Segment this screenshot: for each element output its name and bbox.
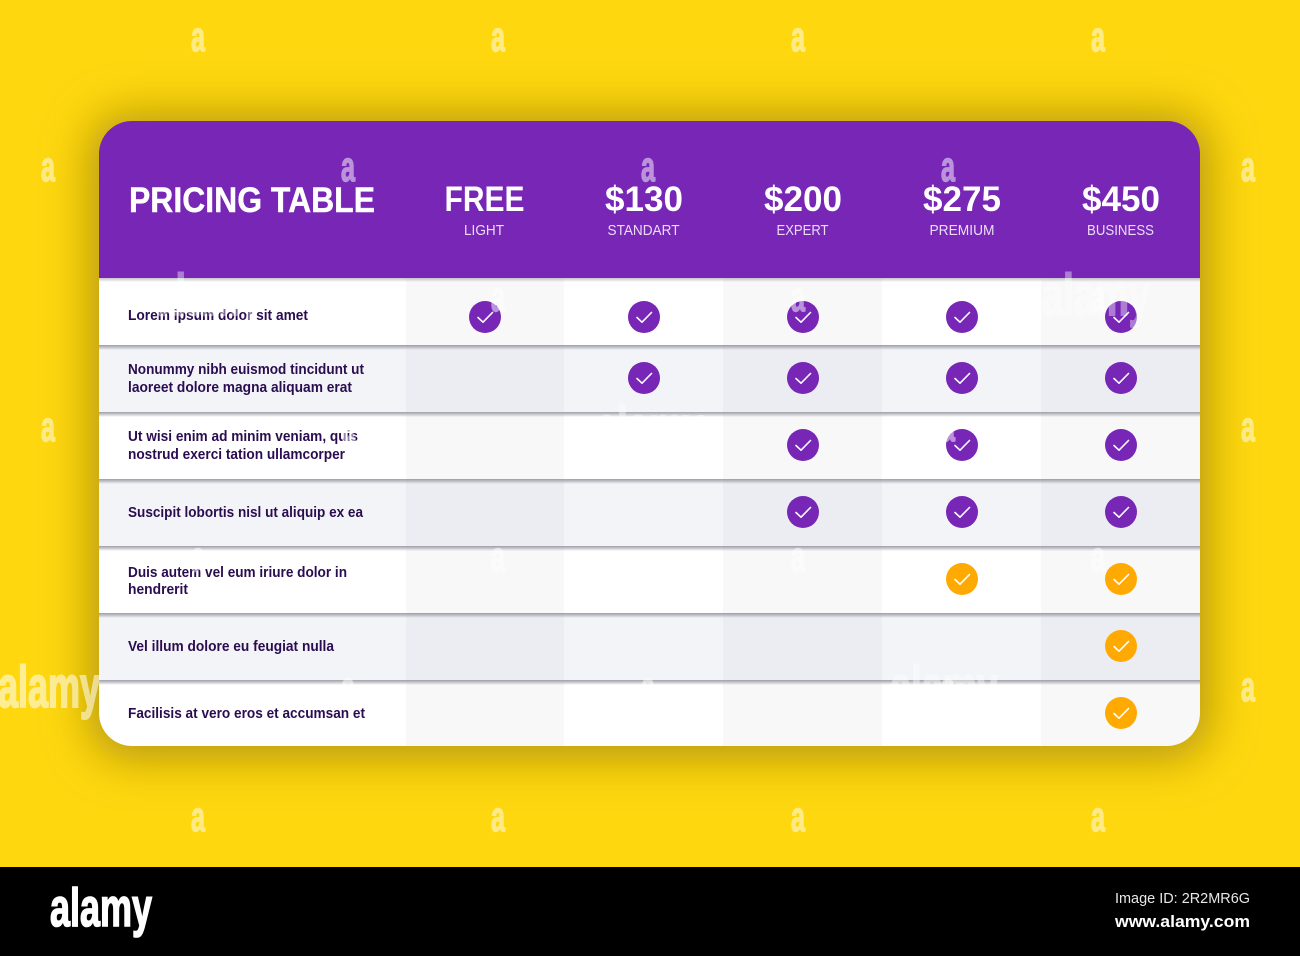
- watermark wordmarks: alamy: [596, 395, 704, 460]
- watermark letters: a: [191, 793, 205, 840]
- watermark letters: a: [941, 143, 955, 190]
- alternating column shading: [406, 278, 1200, 746]
- watermark wordmarks: alamy: [0, 655, 100, 720]
- feature labels: Facilisis at vero eros et accumsan et: [128, 706, 365, 722]
- watermark letters: a: [491, 793, 505, 840]
- watermark letters: a: [1241, 403, 1255, 450]
- watermark letters: a: [1241, 143, 1255, 190]
- watermark wordmarks: alamy: [1042, 263, 1150, 328]
- watermark letters: a: [641, 143, 655, 190]
- watermark letters: a: [941, 403, 955, 450]
- watermark wordmarks: [0, 263, 1150, 720]
- feature labels: laoreet dolore magna aliquam erat: [128, 380, 352, 396]
- watermark letters: a: [941, 663, 955, 710]
- card drop shadow: [89, 113, 1210, 759]
- plan: 275 premium: [923, 180, 1001, 239]
- plan: 450 business: BUSINESS: [1087, 223, 1154, 239]
- watermark letters: a: [341, 663, 355, 710]
- plan: 275 premium: $275: [923, 180, 1001, 219]
- watermark letters: a: [41, 403, 55, 450]
- plan: 275 premium: PREMIUM: [930, 223, 994, 239]
- plan: free light: [444, 180, 524, 239]
- watermark letters: a: [791, 793, 805, 840]
- watermark letters: a: [341, 143, 355, 190]
- watermark letters: a: [41, 143, 55, 190]
- watermark letters: a: [641, 403, 655, 450]
- feature labels: Suscipit lobortis nisl ut aliquip ex ea: [128, 505, 364, 521]
- footer logo: alamy: [50, 878, 152, 938]
- plan: 450 business: [1082, 180, 1160, 239]
- plan: 130 standart: [605, 180, 683, 239]
- plan: 450 business: $450: [1082, 180, 1160, 219]
- watermark letters: a: [1241, 663, 1255, 710]
- feature labels: Vel illum dolore eu feugiat nulla: [128, 639, 335, 655]
- feature labels: Lorem ipsum dolor sit amet: [128, 308, 308, 324]
- feature labels: [128, 308, 365, 722]
- watermark letters: a: [191, 533, 205, 580]
- watermark letters: a: [491, 13, 505, 60]
- plan: free light: FREE: [444, 180, 524, 219]
- plan: 130 standart: STANDART: [608, 223, 680, 239]
- footer bar: [0, 867, 1300, 956]
- orange check icons: [946, 563, 1137, 729]
- watermark wordmarks: alamy: [890, 655, 998, 720]
- plan: 130 standart: $130: [605, 180, 683, 219]
- footer image id: Image ID: 2R2MR6G: [1115, 891, 1250, 907]
- feature labels: Duis autem vel eum iriure dolor in: [128, 565, 347, 581]
- watermark letters: a: [1091, 13, 1105, 60]
- watermark letters: a: [641, 663, 655, 710]
- watermark letters: a: [791, 13, 805, 60]
- purple check icons: [469, 301, 1137, 528]
- watermark letters: a: [791, 273, 805, 320]
- plan: 200 expert: EXPERT: [776, 223, 829, 239]
- header band: [99, 121, 1200, 278]
- check marks: [478, 312, 1128, 718]
- watermark letters: a: [491, 273, 505, 320]
- watermark letters: a: [1091, 273, 1105, 320]
- row divider shadows: [99, 278, 1200, 685]
- watermark wordmarks: alamy: [155, 263, 260, 328]
- plan: 200 expert: $200: [764, 180, 842, 219]
- title: PRICING TABLE: [129, 181, 375, 220]
- watermark letters: a: [1091, 533, 1105, 580]
- feature labels: Ut wisi enim ad minim veniam, quis: [128, 429, 358, 445]
- pricing table card: [99, 121, 1200, 746]
- watermark letters: a: [791, 533, 805, 580]
- watermark letters: a: [191, 273, 205, 320]
- watermark letters: a: [341, 403, 355, 450]
- watermark letters: a: [191, 13, 205, 60]
- footer url: www.alamy.com: [1114, 912, 1250, 931]
- watermark letters: a: [1091, 793, 1105, 840]
- table rows: [99, 278, 1200, 746]
- feature labels: hendrerit: [128, 582, 188, 598]
- plan: 200 expert: [764, 180, 842, 239]
- feature labels: nostrud exerci tation ullamcorper: [128, 447, 345, 463]
- watermark letters: a: [491, 533, 505, 580]
- feature labels: Nonummy nibh euismod tincidunt ut: [128, 362, 364, 378]
- plan: free light: LIGHT: [464, 223, 504, 239]
